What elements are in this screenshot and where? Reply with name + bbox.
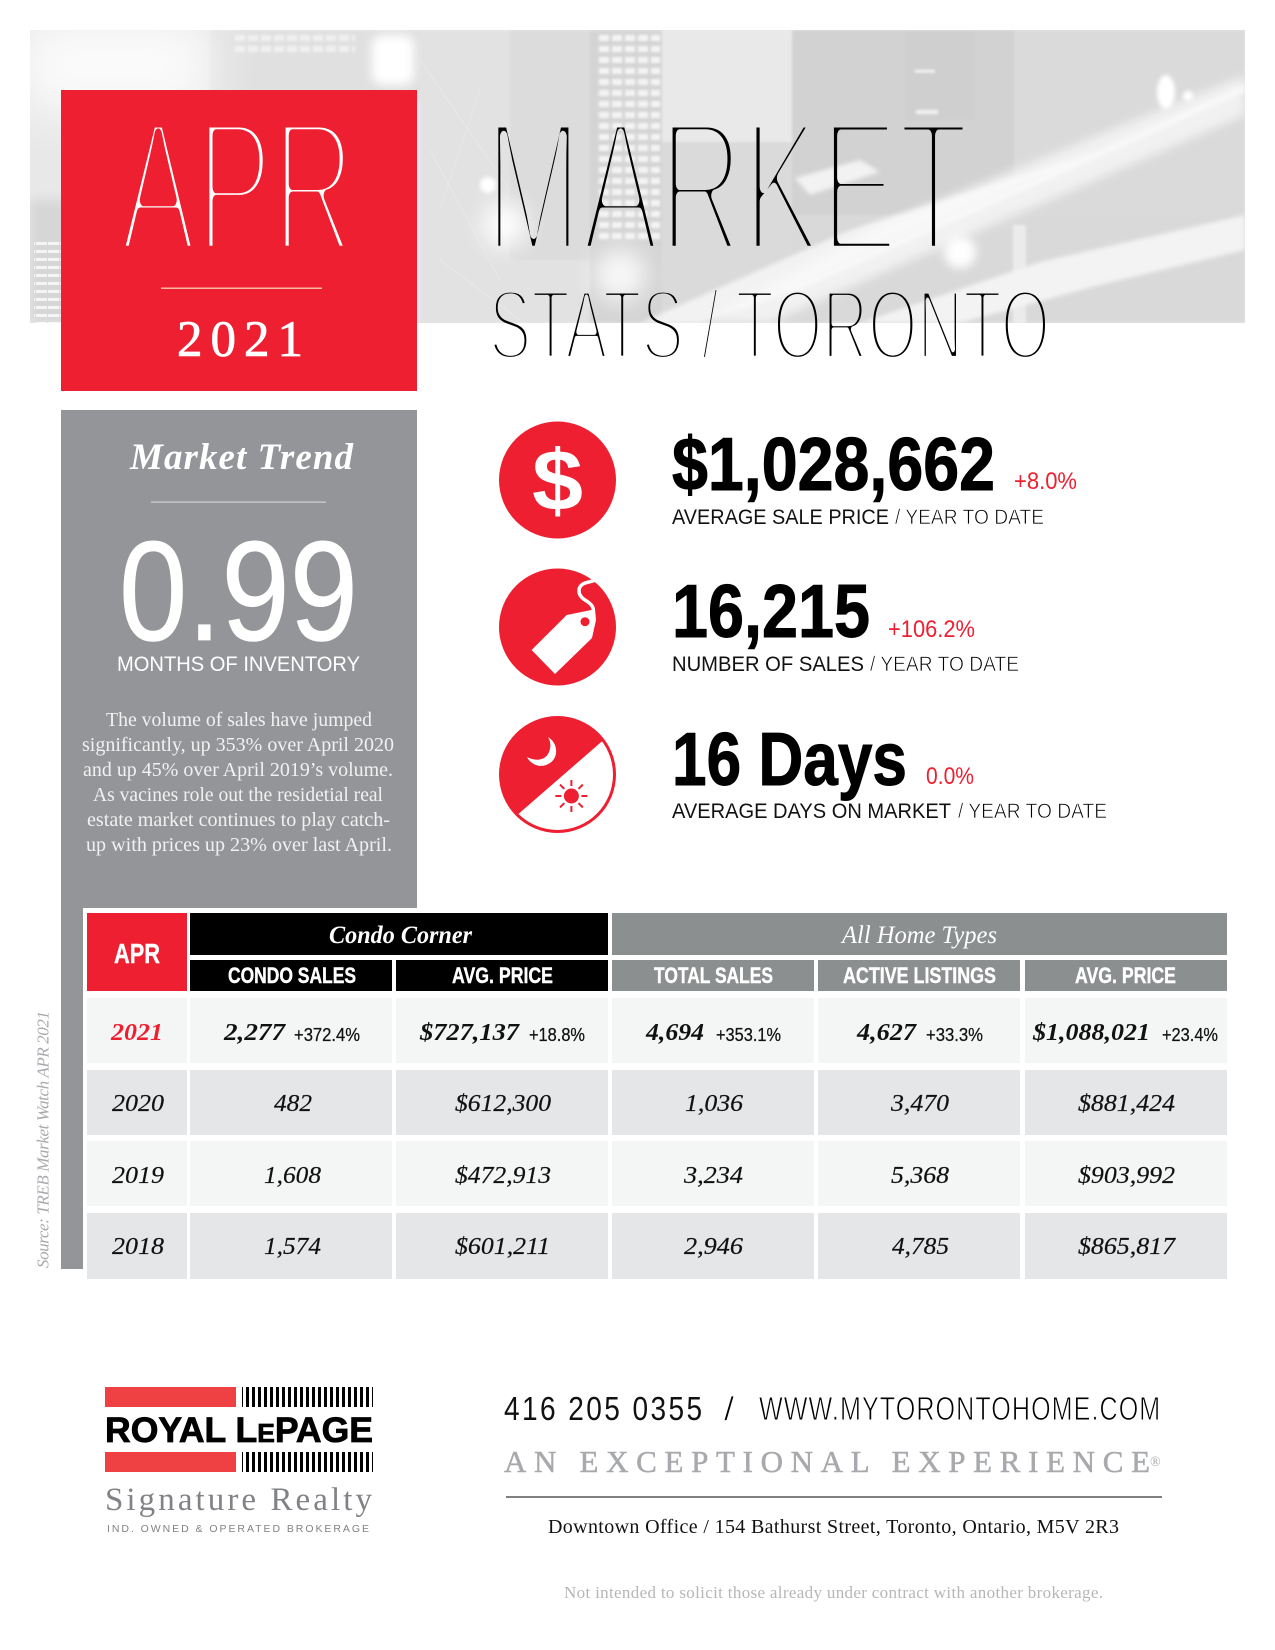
column: active listings [818,960,1020,991]
caption: / YEAR TO DATE [958,800,1107,823]
trend commentary: As vacines role out the residetial real [93,784,383,806]
source note: Source: TREB Market Watch APR 2021 [34,1011,52,1268]
row: 2021: +23.4% [1162,1025,1218,1045]
stat: days on market [499,716,1107,833]
icon: moon and sun [499,716,616,833]
icon: dollar sign [499,422,616,538]
row: 2021: $1,088,021 [1032,1020,1150,1046]
row: 2021: $727,137 [419,1020,520,1046]
row: 2019: 1,608 [264,1163,321,1189]
caption: NUMBER OF SALES [672,653,864,676]
header group: condo corner [190,913,608,955]
row: 2019: 5,368 [891,1163,949,1189]
row: 2021: 2,277 [223,1020,286,1046]
row: 2018: $865,817 [1078,1234,1176,1260]
value: 16 Days [672,717,907,801]
registered mark: ® [1150,1455,1161,1470]
caption [672,506,1044,529]
logo name: Signature Realty [105,1482,372,1518]
caption: / YEAR TO DATE [895,506,1044,529]
row: 2018: 4,785 [892,1234,949,1260]
row: 2018: 1,574 [264,1234,321,1260]
separator slash: / [724,1390,735,1427]
column: condo avg price [396,960,608,991]
row: 2021: +353.1% [716,1025,781,1045]
row: 2020: 1,036 [685,1091,743,1117]
header cell: apr: APR [114,938,160,969]
header group: condo corner: Condo Corner [329,922,472,949]
row: 2021: +372.4% [294,1025,360,1045]
row: 2018 [87,1213,1227,1279]
row: 2020: $612,300 [455,1091,551,1117]
months of inventory label: MONTHS OF INVENTORY [117,653,360,676]
website: WWW.MYTORONTOHOME.COM [759,1391,1160,1428]
title: market: MARKET [485,81,969,293]
icon: dollar sign: $ [532,433,583,529]
caption: / YEAR TO DATE [870,653,1019,676]
stat: number of sales [499,568,1019,686]
row: 2020: 2020 [112,1091,164,1117]
row: 2019: 2019 [112,1163,164,1189]
row: 2021 [87,998,1227,1063]
row: 2018: 2,946 [684,1234,743,1260]
trend commentary: The volume of sales have jumped [106,709,372,731]
column: condo avg price: AVG. PRICE [452,963,553,988]
row: 2021: +33.3% [926,1025,983,1045]
panel: date block [61,81,417,391]
header group: all home types: All Home Types [840,922,997,949]
slogan: AN EXCEPTIONAL EXPERIENCE [504,1444,1150,1479]
column: condo sales: CONDO SALES [228,963,356,988]
trend commentary: and up 45% over April 2019’s volume. [83,759,393,781]
column: active listings: ACTIVE LISTINGS [843,963,996,988]
value: 16,215 [672,569,870,653]
caption [672,800,1107,823]
row: 2021: 4,627 [856,1020,917,1046]
month APR: APR [120,81,355,293]
heading: market trend: Market Trend [129,437,354,478]
row: 2019: $472,913 [455,1163,551,1189]
icon: price tag [499,568,616,686]
header photo: city street at night [20,20,1245,323]
table: april statistics [87,913,1227,1279]
months of inventory value: 0.99 [119,512,358,671]
trend commentary: up with prices up 23% over last April. [86,834,392,856]
row: 2020: $881,424 [1078,1091,1175,1117]
caption [672,653,1019,676]
trend commentary: estate market continues to play catch- [87,809,390,831]
contact block [504,1390,1162,1602]
caption: AVERAGE SALE PRICE [672,506,889,529]
column: avg price: AVG. PRICE [1075,963,1176,988]
logo tagline: IND. OWNED & OPERATED BROKERAGE [107,1523,369,1535]
change: +106.2% [888,616,975,643]
caption: AVERAGE DAYS ON MARKET [672,800,951,823]
office address: Downtown Office / 154 Bathurst Street, Toronto, Ontario, M5V 2R3 [548,1516,1119,1538]
row: 2021: 4,694 [645,1020,704,1046]
header cell: apr [87,913,187,991]
row: 2018: 2018 [112,1234,164,1260]
stat: average sale price [499,422,1077,538]
disclaimer: Not intended to solicit those already under contract with another brokerage. [564,1583,1103,1602]
table header [87,913,1227,991]
row: 2020: 3,470 [890,1091,949,1117]
year 2021: 2021 [177,312,303,368]
logo wordmark: ROYAL LEPAGE [105,1411,373,1450]
logo: royal lepage signature realty [105,1387,373,1535]
column: avg price [1025,960,1227,991]
trend commentary [82,709,394,856]
trend commentary: significantly, up 353% over April 2020 [82,734,394,756]
change: 0.0% [926,763,974,790]
row: 2019 [87,1141,1227,1206]
row: 2021: 2021 [110,1020,163,1046]
row: 2020 [87,1070,1227,1135]
panel: market trend [61,410,417,1269]
row: 2019: $903,992 [1078,1163,1175,1189]
row: 2020: 482 [274,1091,312,1117]
row: 2021: +18.8% [529,1025,585,1045]
column: total sales: TOTAL SALES [654,963,773,988]
row: 2018: $601,211 [455,1234,550,1260]
row: 2019: 3,234 [683,1163,743,1189]
change: +8.0% [1014,468,1077,495]
phone number: 416 205 0355 [504,1391,702,1428]
header group: all home types [612,913,1227,955]
value: $1,028,662 [672,422,995,506]
column: total sales [612,960,814,991]
column: condo sales [190,960,392,991]
